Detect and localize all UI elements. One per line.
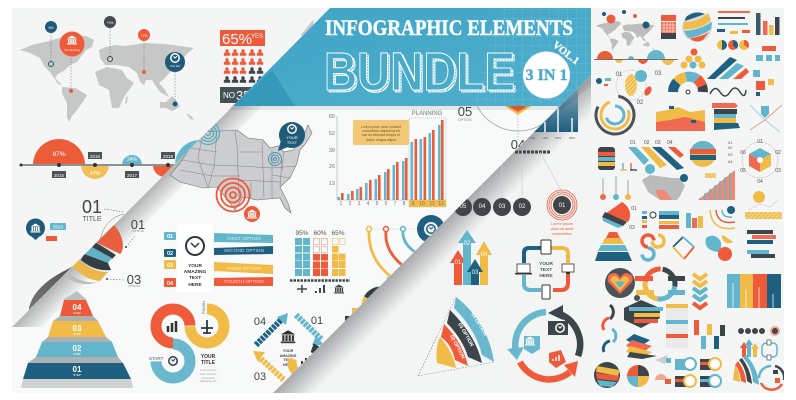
option list with ribbons: FOURTH OPTION — [224, 279, 264, 285]
curved lines with large pin: TITLE — [386, 276, 398, 281]
radial chart with option labels: 04 — [511, 137, 525, 152]
S-curve process: dolor sit amet — [200, 372, 217, 376]
thumb: fan — [733, 355, 759, 385]
arrows up: 01 to 04: 03 — [472, 270, 479, 276]
option labels on cone: OPTION — [128, 284, 140, 288]
fold shadow wedge — [29, 265, 74, 310]
table with donut: percentages: 14% — [347, 344, 358, 350]
heading: BUNDLE hatched depth: BUNDLE — [326, 44, 517, 104]
layer 1: upper-left collage sheet — [20, 16, 314, 310]
icon: bank pin with tags: 2016 — [53, 224, 64, 230]
option list with ribbons: SECOND OPTION — [224, 248, 265, 254]
thumb: diagonal stripes — [628, 140, 684, 170]
bar chart: planning: 5 — [376, 201, 379, 207]
bar chart: planning: 4 — [367, 201, 370, 207]
thumb: venn: 01 — [616, 72, 623, 78]
S-curve process: START — [149, 356, 164, 361]
percent grid: 95% 60% 65% — [290, 230, 350, 294]
bar chart: planning: 7 — [394, 201, 397, 207]
bar chart: planning — [329, 111, 446, 207]
table with donut: percentages: 21% — [347, 364, 358, 370]
callout: yellow note: consectetur adipiscing elit — [362, 129, 400, 133]
radial chart with option labels: OPTION — [458, 118, 472, 122]
thumb: hexagon: 01 — [757, 139, 763, 145]
US map with targets: YOUR — [286, 135, 298, 140]
timeline with semicircles: 87% — [52, 151, 66, 158]
thumb: leaves — [706, 235, 733, 261]
option list with ribbons: YOUR — [188, 263, 202, 269]
table with donut: percentages: 20% — [347, 357, 358, 363]
S-curve process — [149, 301, 224, 383]
thumb: heart sphere — [605, 268, 635, 298]
cone with layered rings — [64, 224, 123, 284]
thumb: hexagon: 04 — [757, 179, 763, 185]
panel: thumbnail overview — [593, 10, 784, 390]
US map with targets — [170, 122, 312, 222]
bar chart: planning: 12 — [438, 201, 444, 207]
device cycle — [515, 240, 574, 299]
bar chart: planning: 26 — [329, 164, 335, 170]
thumb: label bars — [747, 230, 776, 258]
thumb: hexagon: 05 — [740, 168, 746, 174]
timeline with semicircles: 2017 — [127, 173, 138, 178]
diamond arrows: 01 to 04: 04 — [254, 316, 266, 328]
sheet background — [292, 142, 524, 374]
thumb: progress bars and pies — [717, 11, 750, 50]
option list with ribbons: 04 — [167, 281, 174, 287]
fan chart: options — [418, 297, 494, 376]
fold shadow along upper-left edge — [12, 106, 263, 327]
fan chart: options: 02 OPTION — [448, 334, 466, 360]
arrows up: 01 to 04: 04 — [481, 252, 488, 258]
thumb: spiral circles — [593, 93, 637, 137]
pyramid: 02 — [73, 344, 82, 353]
option list with ribbons: 02 — [167, 251, 173, 257]
bar chart: planning: 6 — [385, 201, 388, 207]
timeline with semicircles: 2018 — [163, 154, 174, 159]
radial chart with option labels — [458, 106, 560, 149]
thumb: hatched strip — [745, 200, 782, 219]
thumb: diagonal ribbons — [707, 57, 749, 79]
thumb: venn — [616, 70, 662, 106]
percent grid: 95% 60% 65%: 60% — [313, 230, 327, 237]
thumb: small arrows up — [740, 339, 759, 357]
thumb: gauge — [673, 77, 703, 94]
bar chart: planning: 8 — [403, 201, 406, 207]
thumb: timeline — [594, 50, 678, 65]
thumb: small bank pin — [596, 78, 611, 86]
label: vol.1: VOL.1 — [550, 40, 581, 67]
title: 01 TITLE — [82, 200, 124, 239]
hatched bar and lollipop chart: Lorem ipsum — [551, 222, 573, 226]
stat block: 65% yes, no 35%: NO — [223, 91, 235, 100]
stat block: 65% yes, no 35%: 35% — [236, 88, 262, 103]
arrows up: 01 to 04: 01 — [455, 260, 462, 266]
panel: thumbnail overview background — [590, 8, 784, 393]
thumb: wave — [710, 88, 746, 96]
arrows up: 01 to 04: 02 — [464, 241, 471, 247]
S-curve process: Lorem ipsum — [200, 368, 217, 372]
hatched bar and lollipop chart: 03 — [499, 204, 506, 210]
option list with ribbons — [164, 232, 273, 287]
S-curve process: consetetur — [201, 376, 215, 380]
option labels on cone — [106, 217, 145, 288]
diamond arrows: 01 to 04: AMAZING — [280, 354, 297, 358]
bar chart: planning: 52 — [329, 131, 335, 137]
S-curve process: YOUR — [201, 354, 216, 360]
thumb: lollipops — [738, 326, 780, 336]
bar chart: planning: 2 — [349, 201, 352, 207]
percent grid: 95% 60% 65%: 95% — [295, 230, 309, 237]
thumb: pie — [627, 365, 649, 387]
map pins: +7% — [140, 34, 148, 38]
pyramid — [21, 291, 133, 388]
hatched bar and lollipop chart: 05 — [460, 204, 467, 210]
thumb: cone — [602, 202, 637, 231]
circular arrows with tags — [507, 305, 580, 379]
hatched bar and lollipop chart: 40 — [461, 173, 469, 179]
badge: 3 in 1: 3 IN 1 — [526, 67, 568, 84]
thumb: column panel — [727, 274, 781, 308]
timeline with semicircles — [20, 139, 199, 179]
pyramid: 04 — [73, 303, 82, 312]
thumb: up and down bars — [694, 320, 725, 349]
thumb: small bar chart — [698, 170, 735, 200]
table with donut: percentages: 10% — [347, 371, 358, 377]
device cycle: YOUR — [539, 261, 553, 267]
thumb: 3D layers — [626, 334, 657, 359]
thumb: thermometers — [600, 176, 631, 200]
donut with bar: clock — [345, 286, 380, 321]
pyramid: 03 — [73, 324, 82, 333]
diamond arrows: 01 to 04 — [253, 313, 324, 383]
diamond arrows: 01 to 04: TEXT — [283, 358, 293, 362]
table with donut: percentages: 15% — [347, 351, 358, 357]
thumb: device cycle — [762, 340, 777, 360]
thumb: donut with strips — [635, 267, 685, 301]
thumb: option list — [642, 211, 679, 229]
thumb: small arrows — [620, 163, 637, 170]
option labels on cone: 03 — [127, 272, 141, 287]
option list with ribbons: HERE — [188, 282, 202, 288]
thumb: circle pyramid — [680, 48, 706, 68]
donut: bottom segment — [288, 344, 320, 374]
title: 01 TITLE: TITLE — [82, 216, 102, 223]
thumb: striped columns — [756, 13, 780, 35]
banner: title ribbon — [228, 8, 591, 110]
thumb: curved lines — [710, 206, 735, 229]
bar chart: planning: 10 — [419, 201, 425, 207]
hatched bar and lollipop chart: consectetur — [552, 232, 573, 236]
thumb: gold circle — [753, 191, 765, 203]
bar chart: planning: 11 — [429, 201, 435, 207]
diamond arrows: 01 to 04: 03 — [254, 371, 266, 383]
device cycle: HERE — [539, 273, 553, 279]
diamond arrows: 01 to 04: HERE — [283, 363, 294, 367]
heading: INFOGRAPHIC ELEMENTS: INFOGRAPHIC ELEMENTS — [325, 15, 573, 40]
hatched bar and lollipop chart — [454, 150, 577, 236]
fan chart: options: 03 OPTION — [456, 322, 475, 348]
thumb: striped circle: 02 — [728, 145, 733, 150]
hatched bar and lollipop chart: 02 — [519, 204, 526, 210]
callout: yellow note: Lorem ipsum dolor sit amet — [361, 125, 401, 129]
S-curve process: adipiscing elit — [200, 379, 217, 383]
thumb: circular arrows — [759, 366, 784, 390]
title: 01 TITLE: 01 — [82, 197, 102, 217]
fold shadow along edge — [273, 75, 591, 393]
callout: yellow note: sed do eiusmod tempor et — [362, 133, 400, 137]
column chart: sep to dec — [529, 88, 578, 140]
option list with ribbons: 03 — [167, 263, 173, 269]
column chart: sep to dec: sep — [529, 135, 536, 140]
panel: main collage background — [12, 8, 590, 393]
thumb: US map — [642, 164, 688, 200]
thumb: hexagon: 03 — [775, 168, 781, 174]
band: white margin right of overview — [784, 0, 796, 400]
column chart: sep to dec: dec — [569, 135, 575, 140]
thumb: crossing line chart — [750, 105, 782, 132]
thumb: cone: 03 — [629, 225, 635, 231]
thumb: cone: 01 — [631, 206, 637, 212]
bar chart: planning: 3 — [358, 201, 361, 207]
diamond arrows: 01 to 04: 01 — [311, 315, 323, 327]
layer 3: lower-right collage sheet — [273, 75, 591, 393]
thumb: venn: 03 — [655, 71, 662, 77]
pyramid: STEP — [73, 332, 81, 336]
option list with ribbons: THIRD OPTION — [227, 266, 262, 272]
option labels on cone: OPTION — [132, 229, 144, 233]
thumb: 3D hexagon block — [624, 295, 663, 328]
thumb: ribbon ball — [594, 362, 620, 388]
pyramid: STEP — [73, 352, 81, 356]
thumb: hexagon: 02 — [775, 150, 781, 156]
bar chart: planning: PLANNING — [412, 111, 443, 117]
timeline with semicircles: 47% — [90, 171, 101, 177]
S-curve process: TITLE — [201, 360, 216, 366]
thumb: percent columns — [686, 213, 703, 228]
thumb: striped circle — [690, 140, 733, 167]
thumb: area chart — [656, 106, 705, 131]
thumb: stacked ribbons — [712, 103, 740, 130]
thumb: cylinder — [598, 147, 615, 170]
option list with ribbons: AMAZING — [184, 269, 206, 275]
percent grid: 95% 60% 65%: 65% — [331, 230, 345, 237]
thumb: arc chain — [603, 305, 616, 352]
bar chart: planning: 39 — [329, 148, 335, 154]
thumb: 65% grid — [661, 15, 676, 39]
map pins: Your text — [170, 64, 180, 68]
column chart: sep to dec: nov — [555, 135, 561, 140]
thumb: square tags — [753, 70, 774, 96]
sheet background — [56, 152, 187, 283]
hatched bar and lollipop chart: 04 — [479, 204, 486, 210]
heading: BUNDLE: BUNDLE — [324, 42, 515, 102]
option list with ribbons: 01 — [167, 234, 173, 240]
US map with targets: TEXT — [287, 140, 298, 145]
bar chart: planning: 13 — [329, 181, 335, 187]
stat block: 65% yes, no 35% — [220, 30, 265, 103]
icon: bank pin with tags — [26, 218, 66, 241]
map pins — [45, 16, 185, 106]
thumb: diamond — [673, 237, 694, 259]
S-curve process: FINISH — [201, 301, 206, 314]
thumb: diagonal stripes: 04 — [667, 140, 673, 146]
world map — [20, 36, 194, 122]
bar chart: planning: 9 — [412, 201, 415, 207]
option list with ribbons: FIRST OPTION — [227, 236, 261, 242]
timeline with semicircles: 24% — [127, 157, 138, 163]
thumb: triangles and squares — [655, 355, 671, 384]
thumb: tagged donuts — [675, 358, 721, 387]
timeline with semicircles: 2016 — [90, 154, 101, 159]
thumb: striped circle: 03 — [728, 152, 733, 157]
thumb: striped circle: 04 — [728, 159, 733, 164]
arrows up: 01 to 04 — [450, 230, 492, 285]
callout: yellow note: dolore magna aliqua — [366, 138, 396, 142]
thumb: hexagon — [740, 139, 781, 185]
callout: yellow note — [353, 120, 409, 145]
map pins: Your amazing — [64, 48, 80, 52]
timeline with semicircles: 2015 — [54, 173, 65, 178]
pyramid: STEP — [73, 311, 81, 315]
map pins: +3% — [106, 21, 114, 25]
pyramid: STEP — [73, 373, 81, 377]
thumb: diagonal stripes: 02 — [644, 140, 650, 146]
device cycle: TEXT — [540, 267, 552, 273]
diamond arrows: 01 to 04: YOUR — [283, 349, 294, 353]
badge: 3 in 1 — [523, 52, 570, 98]
thumb: venn: 02 — [637, 100, 644, 106]
fragment at top of sheet — [300, 20, 314, 36]
thumb: stacked panels — [666, 304, 688, 348]
thumb: pyramid — [595, 232, 632, 261]
map pins: 5% — [48, 26, 54, 30]
thumb: org chart — [756, 46, 780, 61]
thumb: striped globe — [682, 12, 712, 42]
thumb: diagonal stripes: 03 — [655, 140, 661, 146]
table with donut: percentages — [339, 339, 401, 379]
hatched bar and lollipop chart: 01 — [559, 203, 566, 209]
column chart: sep to dec: oct — [542, 135, 549, 140]
pyramid: 01 — [73, 365, 82, 374]
thumb: world map — [596, 10, 655, 50]
donut with bar: clock: 10% — [352, 318, 363, 324]
bar chart: planning: 65 — [329, 114, 335, 120]
hatched bar and lollipop chart: dolor sit amet — [551, 227, 574, 231]
stat block: 65% yes, no 35%: 65% — [222, 31, 252, 48]
bar chart: planning: 1 — [340, 201, 343, 207]
layer 2: middle collage sheet — [12, 106, 560, 388]
curved lines with large pin — [366, 215, 445, 281]
thumb: striped circle: 01 — [728, 140, 733, 145]
thumb: S-curve — [642, 235, 664, 260]
option labels on cone: 01 — [131, 217, 145, 232]
thumb: chevron stack — [693, 274, 707, 308]
thumb: diagonal stripes: 01 — [630, 140, 636, 146]
radial chart with option labels: 05 — [458, 104, 472, 119]
stat block: 65% yes, no 35%: YES — [251, 34, 263, 40]
thumb: hexagon: 06 — [740, 150, 746, 156]
fan chart: options: 04 OPTION — [469, 312, 488, 338]
option list with ribbons: TEXT — [189, 275, 201, 281]
